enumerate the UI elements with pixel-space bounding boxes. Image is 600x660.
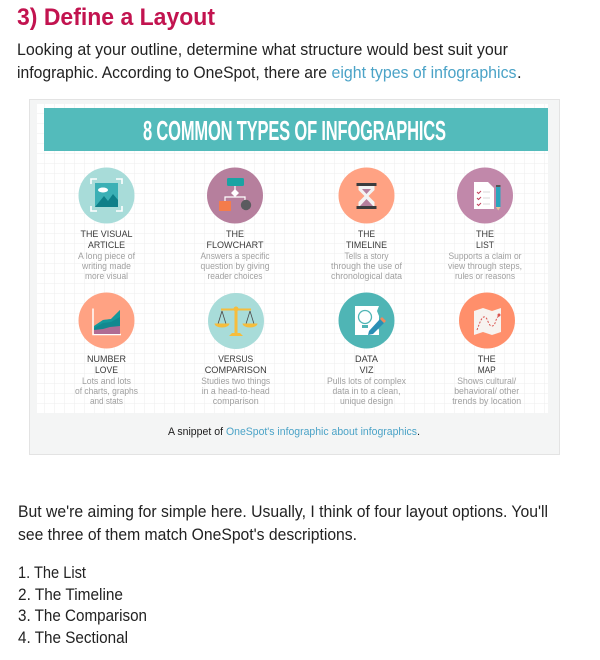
card: data viz: DATA <box>355 354 379 365</box>
icon: hourglass <box>338 168 394 224</box>
paragraph: simple layouts: But we're aiming for simple here. Usually, I think of four layout options. You'll <box>18 503 548 521</box>
card: versus comparison: in a head-to-head <box>202 386 270 396</box>
numbered list: 1. The List <box>18 564 86 582</box>
card: the flowchart <box>200 168 270 281</box>
intro paragraph <box>17 41 522 82</box>
card: the flowchart: FLOWCHART <box>206 240 264 251</box>
card: the map: Shows cultural/ <box>457 376 517 386</box>
card: data viz <box>327 292 406 406</box>
caption: A snippet of <box>168 426 224 438</box>
card: the map: MAP <box>478 365 496 376</box>
card: the visual article <box>78 168 135 281</box>
card: the map <box>452 292 521 406</box>
icon: folded map <box>459 292 515 348</box>
card: the timeline: Tells a story <box>344 251 389 261</box>
paragraph: simple layouts <box>18 503 548 544</box>
card: the timeline <box>331 168 402 281</box>
caption: OneSpot's infographic about infographics <box>226 426 417 438</box>
card: the map: trends by location <box>452 396 521 406</box>
card: the list: LIST <box>476 240 494 251</box>
card: versus comparison: COMPARISON <box>205 365 267 376</box>
card: the list: rules or reasons <box>455 271 515 281</box>
numbered list: 2. The Timeline <box>18 586 123 604</box>
card: data viz: unique design <box>340 396 393 406</box>
card: the timeline: chronological data <box>331 271 402 281</box>
intro paragraph: . <box>517 64 522 82</box>
icon: picture <box>78 168 134 224</box>
card: number love: LOVE <box>95 365 118 376</box>
card: versus comparison: Studies two things <box>201 376 271 386</box>
banner: 8 COMMON TYPES OF INFOGRAPHICS <box>143 115 446 146</box>
card: the visual article: A long piece of <box>78 251 135 261</box>
card: the flowchart: reader choices <box>208 271 263 281</box>
card: data viz: VIZ <box>360 365 374 376</box>
icon: flowchart <box>207 168 263 224</box>
card: the list <box>448 168 522 281</box>
card: data viz: Pulls lots of complex <box>327 376 406 386</box>
card: number love: of charts, graphs <box>75 386 138 396</box>
panel: image figure <box>30 100 560 454</box>
card: the map: behavioral/ other <box>454 386 519 396</box>
card: versus comparison: VERSUS <box>218 354 253 365</box>
card: the list: Supports a claim or <box>448 251 522 261</box>
card: the map: THE <box>478 354 496 365</box>
card: the timeline: TIMELINE <box>346 240 387 251</box>
card: the visual article: THE VISUAL <box>80 229 132 240</box>
card: number love: NUMBER <box>87 354 126 365</box>
card: versus comparison <box>201 293 271 406</box>
card: the flowchart: Answers a specific <box>200 251 270 261</box>
card: the timeline: THE <box>358 229 375 240</box>
title: 3) Define a Layout <box>17 4 215 31</box>
icon: scales <box>208 293 264 349</box>
card: number love <box>75 292 138 406</box>
intro paragraph: Looking at your outline, determine what structure would best suit your <box>17 41 508 59</box>
intro paragraph: infographic. According to OneSpot, there are <box>17 64 327 82</box>
banner <box>44 108 548 151</box>
card: the flowchart: question by giving <box>200 261 270 271</box>
card: number love: Lots and lots <box>82 376 131 386</box>
card: number love: and stats <box>90 396 123 406</box>
numbered list <box>18 564 147 647</box>
card: the timeline: through the use of <box>331 261 402 271</box>
card: the visual article: more visual <box>85 271 128 281</box>
card: the visual article: writing made <box>81 261 131 271</box>
icon: checklist and pencil <box>457 168 513 224</box>
intro paragraph: eight types of infographics <box>332 64 516 82</box>
caption: . <box>417 426 420 438</box>
card: the list: THE <box>476 229 494 240</box>
icon: area chart <box>78 292 134 348</box>
infographic snippet <box>37 104 548 413</box>
paragraph: simple layouts: see three of them match OneSpot's descriptions. <box>18 526 357 544</box>
card: versus comparison: comparison <box>213 396 259 406</box>
card: the list: view through steps, <box>448 261 522 271</box>
icon: lightbulb sketch <box>338 292 394 348</box>
card: data viz: data in to a clean, <box>332 386 400 396</box>
card: the flowchart: THE <box>226 229 244 240</box>
numbered list: 3. The Comparison <box>18 607 147 625</box>
card: the visual article: ARTICLE <box>88 240 125 251</box>
numbered list: 4. The Sectional <box>18 629 128 647</box>
